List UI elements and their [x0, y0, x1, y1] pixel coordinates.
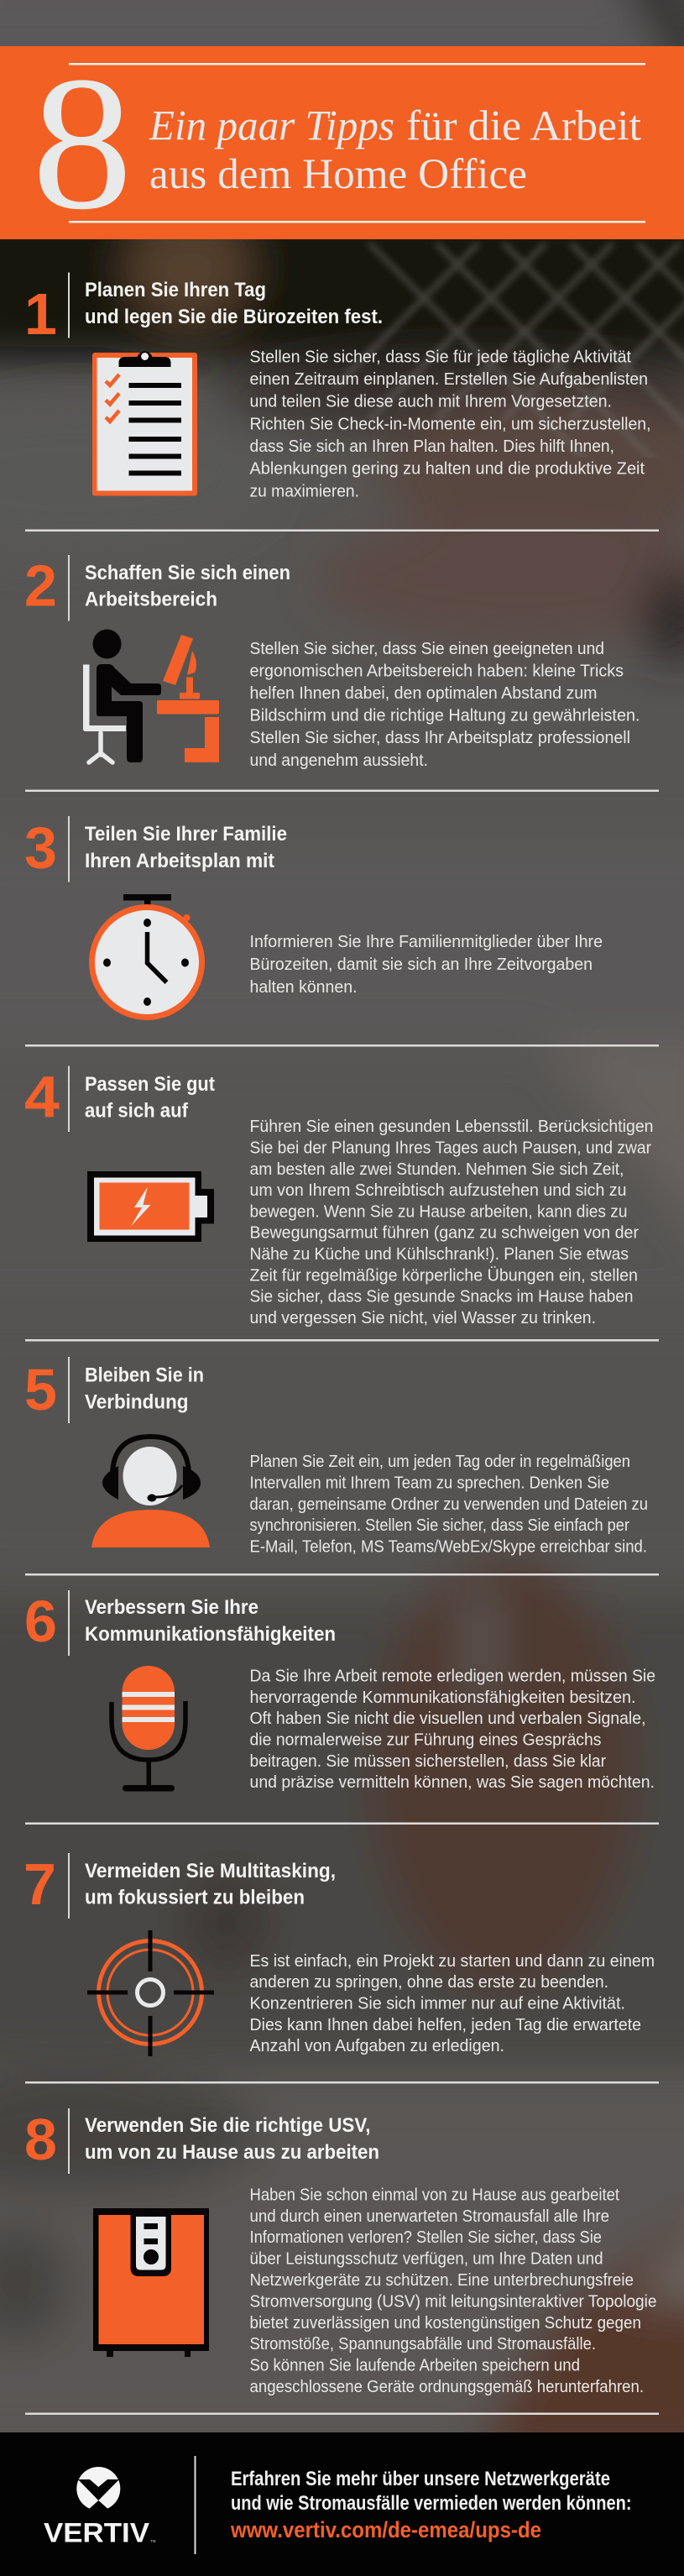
body text 5: Planen Sie Zeit ein, um jeden Tag oder in regelmäßigen — [250, 1452, 630, 1471]
body text 7 — [250, 1951, 655, 2055]
footer — [0, 2432, 684, 2576]
body text 4: am besten alle zwei Stunden. Nehmen Sie sich Zeit, — [250, 1160, 624, 1179]
body text 1: dass Sie sich an Ihren Plan halten. Dies hilft Ihnen, — [250, 437, 614, 456]
title: aus dem Home Office — [149, 151, 527, 198]
heading 4 — [85, 1073, 215, 1122]
body text 4 — [250, 1117, 653, 1327]
body text 4: Bewegungsarmut führen (ganz zu schweigen von der — [250, 1223, 639, 1243]
number 3: 3 — [24, 814, 57, 880]
body text 7: Es ist einfach, ein Projekt zu starten und dann zu einem — [250, 1951, 655, 1971]
icon: target crosshair — [87, 1930, 214, 2056]
heading 2 — [85, 562, 290, 611]
body text 8: Stromstöße, Spannungsabfälle und Stromausfälle. — [250, 2334, 596, 2353]
title: Ein paar Tipps — [149, 102, 394, 149]
heading 1 — [85, 279, 383, 328]
body text 7: anderen zu springen, ohne das erste zu beenden. — [250, 1972, 608, 1992]
body text 6: Da Sie Ihre Arbeit remote erledigen werden, müssen Sie — [250, 1667, 655, 1686]
icon: UPS unit — [93, 2208, 209, 2357]
body text 4: Sie sicher, dass Sie gesunde Snacks im Hause haben — [250, 1287, 633, 1306]
body text 6: Oft haben Sie nicht die visuellen und verbalen Signale, — [250, 1709, 646, 1728]
body text 3: halten können. — [250, 977, 358, 997]
body text 5: E-Mail, Telefon, MS Teams/WebEx/Skype erreichbar sind. — [250, 1537, 647, 1557]
body text 8: Stromversorgung (USV) mit leitungsinteraktiver Topologie — [250, 2292, 656, 2311]
body text 4: Sie bei der Planung Ihres Tages auch Pausen, und zwar — [250, 1138, 651, 1157]
body text 6: die normalerweise zur Führung eines Gesprächs — [250, 1730, 601, 1750]
body text 5 — [250, 1452, 648, 1557]
section 6 — [24, 1589, 655, 1792]
number 4: 4 — [24, 1065, 60, 1130]
icon: person at desk — [83, 630, 219, 762]
body text 8: Haben Sie schon einmal von zu Hause aus gearbeitet — [250, 2186, 619, 2205]
body text 1: und teilen Sie diese auch mit Ihrem Vorgesetzten. — [250, 392, 612, 411]
body text 7: Anzahl von Aufgaben zu erledigen. — [250, 2036, 504, 2055]
section 3 — [24, 814, 603, 1020]
footer call to action — [230, 2468, 631, 2542]
body text 4: Zeit für regelmäßige körperliche Übungen ein, stellen — [250, 1265, 638, 1285]
heading 2: Schaffen Sie sich einen — [85, 562, 290, 584]
body text 1 — [250, 348, 651, 500]
number 6: 6 — [24, 1589, 57, 1654]
body text 4: und vergessen Sie nicht, viel Wasser zu trinken. — [250, 1308, 596, 1327]
number 7: 7 — [23, 1851, 56, 1917]
heading 2: Arbeitsbereich — [85, 588, 217, 611]
section 1 — [24, 272, 651, 500]
title — [149, 102, 641, 198]
heading 4: Passen Sie gut — [85, 1073, 215, 1096]
heading 3: Teilen Sie Ihrer Familie — [85, 823, 287, 846]
heading 3 — [85, 823, 287, 872]
heading 8: Verwenden Sie die richtige USV, — [85, 2114, 371, 2137]
icon: headset person — [91, 1437, 210, 1547]
body text 1: Stellen Sie sicher, dass Sie für jede tägliche Aktivität — [250, 348, 631, 366]
heading 4: auf sich auf — [85, 1100, 189, 1122]
body text 7: Konzentrieren Sie sich immer nur auf eine Aktivität. — [250, 1993, 625, 2013]
section 5 — [24, 1357, 648, 1557]
body text 2: Stellen Sie sicher, dass Ihr Arbeitsplatz professionell — [250, 728, 630, 747]
footer call to action: Erfahren Sie mehr über unsere Netzwerkgeräte — [231, 2468, 610, 2490]
footer call to action: www.vertiv.com/de-emea/ups-de — [230, 2517, 541, 2542]
section 7 — [23, 1851, 655, 2056]
body text 2: Bildschirm und die richtige Haltung zu gewährleisten. — [250, 705, 640, 725]
number 1: 1 — [24, 281, 57, 347]
heading 8 — [85, 2114, 379, 2164]
heading 7 — [85, 1860, 336, 1909]
body text 4: Führen Sie einen gesunden Lebensstil. Berücksichtigen — [250, 1117, 653, 1136]
body text 3 — [250, 932, 603, 997]
body text 5: Intervallen mit Ihrem Team zu sprechen. Denken Sie — [250, 1474, 609, 1493]
body text 6: beitragen. Sie müssen sicherstellen, dass Sie klar — [250, 1751, 606, 1771]
body text 2: Stellen Sie sicher, dass Sie einen geeigneten und — [250, 639, 604, 658]
icon: stopwatch clock — [89, 894, 205, 1020]
heading 5 — [85, 1364, 204, 1414]
icon: microphone — [112, 1666, 185, 1792]
section 8 — [24, 2107, 656, 2396]
Vertiv logo — [44, 2467, 156, 2547]
body text 8: angeschlossene Geräte ordnungsgemäß herunterfahren. — [250, 2377, 644, 2396]
body text 5: daran, gemeinsame Ordner zu verwenden und Dateien zu — [250, 1495, 648, 1514]
body text 1: einen Zeitraum einplanen. Erstellen Sie Aufgabenlisten — [250, 369, 648, 389]
big number 8: 8 — [32, 38, 133, 249]
heading 1: und legen Sie die Bürozeiten fest. — [85, 306, 383, 328]
body text 3: Bürozeiten, damit sie sich an Ihre Zeitvorgaben — [250, 955, 593, 974]
body text 2: helfen Ihnen dabei, den optimalen Abstand zum — [250, 683, 598, 703]
heading 6 — [85, 1596, 336, 1646]
body text 3: Informieren Sie Ihre Familienmitglieder über Ihre — [250, 932, 603, 951]
section 4 — [24, 1065, 653, 1327]
body text 6 — [250, 1667, 655, 1792]
heading 1: Planen Sie Ihren Tag — [85, 279, 266, 301]
heading 5: Verbindung — [85, 1390, 188, 1414]
body text 1: Richten Sie Check-in-Momente ein, um sicherzustellen, — [250, 414, 651, 433]
body text 2 — [250, 639, 640, 770]
heading 7: Vermeiden Sie Multitasking, — [85, 1860, 336, 1882]
Vertiv logo: TM — [150, 2539, 156, 2543]
body text 6: und präzise vermitteln können, was Sie sagen möchten. — [250, 1772, 655, 1792]
heading 8: um von zu Hause aus zu arbeiten — [85, 2141, 379, 2164]
heading 3: Ihren Arbeitsplan mit — [85, 850, 274, 872]
body text 8 — [250, 2186, 656, 2396]
body text 4: Nähe zu Küche und Kühlschrank!). Planen Sie etwas — [250, 1244, 629, 1264]
number 2: 2 — [24, 552, 57, 618]
header banner — [0, 38, 684, 249]
number 5: 5 — [24, 1357, 57, 1422]
body text 8: Informationen verloren? Stellen Sie sicher, dass Sie — [250, 2228, 602, 2247]
body text 4: um von Ihrem Schreibtisch aufzustehen und sich zu — [250, 1181, 626, 1200]
body text 2: und angenehm aussieht. — [250, 751, 428, 770]
heading 6: Kommunikationsfähigkeiten — [85, 1623, 336, 1646]
heading 7: um fokussiert zu bleiben — [85, 1886, 305, 1909]
body text 1: zu maximieren. — [250, 481, 359, 500]
body text 8: bietet zuverlässigen und kostengünstigen Schutz gegen — [250, 2313, 641, 2333]
body text 2: ergonomischen Arbeitsbereich haben: kleine Tricks — [250, 662, 624, 680]
body text 5: synchronisieren. Stellen Sie sicher, dass Sie einfach per — [250, 1516, 629, 1535]
body text 8: Netzwerkgeräte zu schützen. Eine unterbrechungsfreie — [250, 2270, 634, 2290]
body text 1: Ablenkungen gering zu halten und die produktive Zeit — [250, 459, 645, 479]
icon: battery — [87, 1171, 214, 1242]
section 2 — [24, 552, 640, 770]
number 8: 8 — [24, 2107, 57, 2172]
body text 7: Dies kann Ihnen dabei helfen, jeden Tag die erwartete — [250, 2015, 641, 2034]
body text 8: So können Sie laufende Arbeiten speichern und — [250, 2356, 580, 2374]
body text 8: und durch einen unerwarteten Stromausfall alle Ihre — [250, 2207, 609, 2226]
title: für die Arbeit — [406, 102, 641, 149]
body text 6: hervorragende Kommunikationsfähigkeiten besitzen. — [250, 1688, 636, 1707]
body text 4: bewegen. Wenn Sie zu Hause arbeiten, kann dies zu — [250, 1202, 628, 1221]
heading 5: Bleiben Sie in — [85, 1364, 204, 1387]
icon: clipboard checklist — [92, 352, 197, 495]
heading 6: Verbessern Sie Ihre — [85, 1596, 258, 1619]
body text 8: über Leistungsschutz verfügen, um Ihre Daten und — [250, 2249, 603, 2269]
Vertiv logo: VERTIV — [44, 2517, 150, 2547]
